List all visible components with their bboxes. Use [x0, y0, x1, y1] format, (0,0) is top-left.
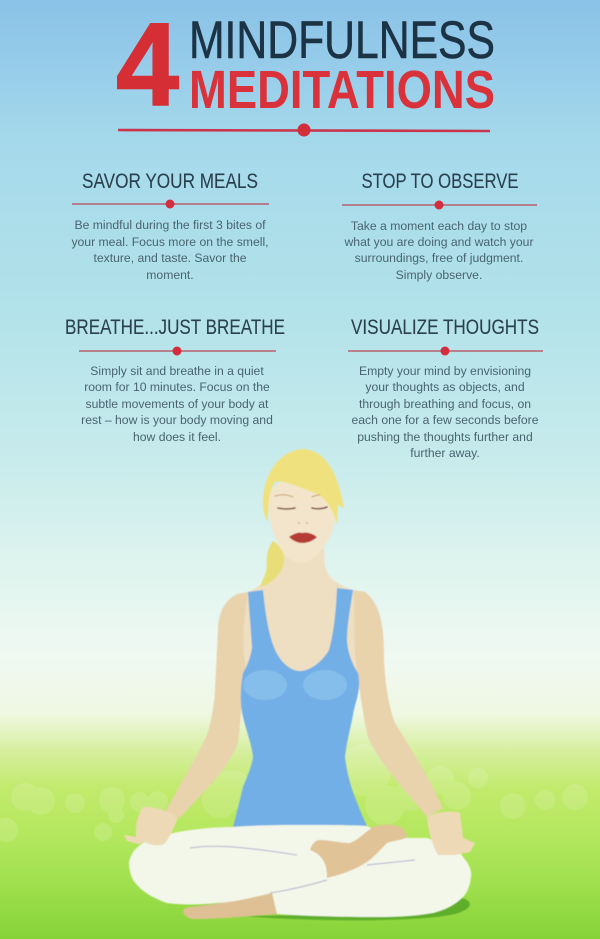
body text: each one for a few seconds before: [352, 413, 539, 427]
title divider: [118, 124, 490, 136]
body text: Empty your mind by envisioning: [359, 364, 531, 378]
body text: surroundings, free of judgment.: [355, 251, 523, 265]
left arm: [165, 592, 248, 818]
body text: Simply sit and breathe in a quiet: [90, 364, 264, 378]
right arm: [353, 590, 443, 817]
bokeh lights: [0, 744, 588, 842]
tank top: [233, 588, 367, 828]
panel: savor your meals: [71, 170, 269, 282]
body text: through breathing and focus, on: [359, 397, 531, 411]
panel: stop to observe: [342, 170, 537, 282]
tank top highlights: [243, 670, 347, 700]
divider: [72, 200, 269, 208]
lips: [289, 533, 317, 543]
body text: your meal. Focus more on the smell,: [71, 235, 269, 249]
right hand: [427, 812, 475, 855]
body text: what you are doing and watch your: [343, 235, 534, 249]
title: [116, 0, 495, 131]
divider: [348, 346, 543, 356]
trouser creases: [190, 846, 415, 893]
numeral 4: 4: [116, 0, 179, 131]
title line: meditations: MEDITATIONS: [189, 60, 495, 120]
hair: [263, 449, 344, 525]
body text: Take a moment each day to stop: [351, 219, 527, 233]
body text: room for 10 minutes. Focus on the: [84, 380, 270, 394]
heading: STOP TO OBSERVE: [362, 170, 518, 193]
nose: [298, 522, 308, 524]
body text: further away.: [410, 446, 480, 460]
heading: SAVOR YOUR MEALS: [82, 170, 258, 193]
upper foot: [310, 825, 407, 878]
ponytail: [260, 541, 284, 587]
panel: visualize thoughts: [348, 316, 543, 460]
body text: texture, and taste. Savor the: [93, 251, 247, 265]
heading: BREATHE...JUST BREATHE: [65, 316, 285, 339]
divider: [79, 346, 276, 356]
ground shadow: [240, 898, 470, 920]
body text: rest – how is your body moving and: [81, 413, 273, 427]
body text: your thoughts as objects, and: [365, 380, 525, 394]
eyes and brows: [275, 495, 327, 509]
white trousers: [129, 825, 471, 917]
left hand: [124, 807, 178, 845]
face: [268, 479, 336, 563]
body text: Simply observe.: [396, 268, 482, 282]
illustration: meditating woman: [124, 449, 475, 920]
neck and shoulders: [232, 540, 368, 680]
heading: VISUALIZE THOUGHTS: [351, 316, 539, 339]
title line: mindfulness: MINDFULNESS: [189, 11, 495, 70]
panel: breathe: [65, 316, 285, 444]
body text: Be mindful during the first 3 bites of: [74, 218, 266, 232]
body text: pushing the thoughts further and: [357, 430, 533, 444]
body text: subtle movements of your body at: [86, 397, 269, 411]
body text: how does it feel.: [133, 430, 221, 444]
body text: moment.: [146, 268, 194, 282]
divider: [342, 200, 537, 210]
lower foot: [183, 893, 277, 919]
